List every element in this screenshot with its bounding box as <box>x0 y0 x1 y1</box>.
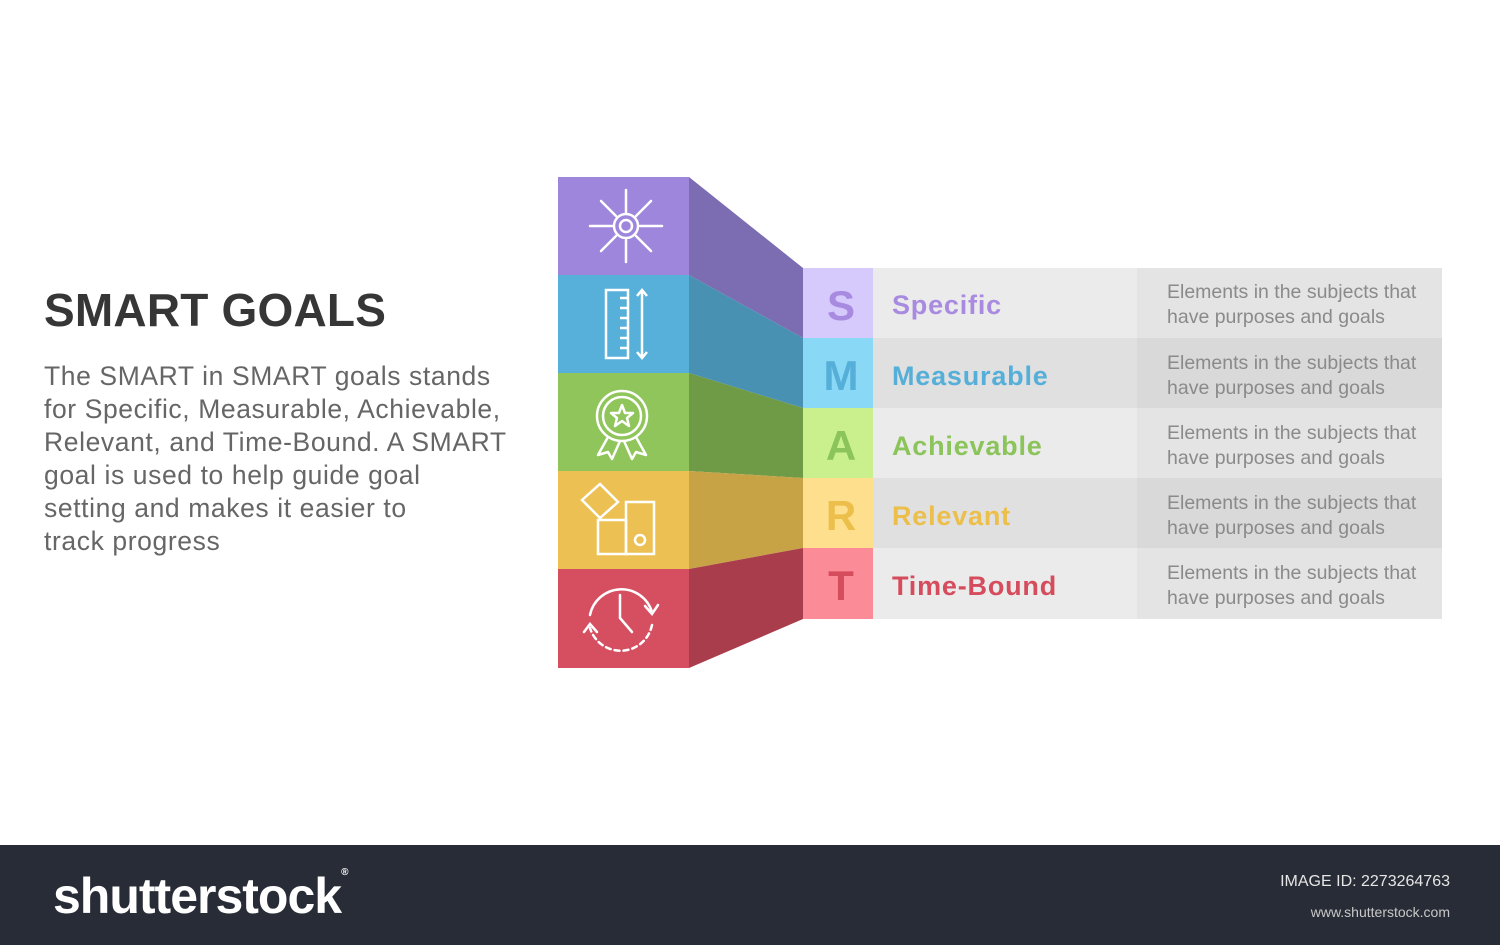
descriptions: have purposes and goals <box>1167 447 1385 469</box>
names: Specific <box>892 290 1002 320</box>
footer logo: shutterstock® <box>53 867 347 924</box>
descriptions: Elements in the subjects that <box>1167 492 1417 514</box>
names: Relevant <box>892 501 1011 531</box>
icon: award badge <box>597 391 647 459</box>
letter cells: S <box>827 282 855 329</box>
title: SMART GOALS <box>44 284 386 336</box>
descriptions: have purposes and goals <box>1167 517 1385 539</box>
description text: The SMART in SMART goals stands <box>44 361 491 391</box>
icon: target with arrows <box>590 190 662 262</box>
descriptions: Elements in the subjects that <box>1167 422 1417 444</box>
descriptions: have purposes and goals <box>1167 306 1385 328</box>
description text: track progress <box>44 526 220 556</box>
description text <box>44 361 507 556</box>
names: Achievable <box>892 431 1043 461</box>
descriptions: have purposes and goals <box>1167 377 1385 399</box>
description text: for Specific, Measurable, Achievable, <box>44 394 501 424</box>
3d block <box>558 177 803 668</box>
letter cells: R <box>826 492 856 539</box>
letter cells: M <box>824 352 858 399</box>
description text: Relevant, and Time-Bound. A SMART <box>44 427 507 457</box>
descriptions: Elements in the subjects that <box>1167 562 1417 584</box>
descriptions <box>1167 281 1417 609</box>
image id: IMAGE ID: 2273264763 <box>1280 873 1450 890</box>
descriptions: have purposes and goals <box>1167 587 1385 609</box>
letter cells: A <box>826 422 856 469</box>
icon: clock <box>584 589 658 651</box>
names <box>892 290 1057 601</box>
letter cells <box>803 268 873 619</box>
description text: goal is used to help guide goal <box>44 460 421 490</box>
icon: ruler <box>606 290 647 358</box>
names: Measurable <box>892 361 1049 391</box>
descriptions: Elements in the subjects that <box>1167 352 1417 374</box>
website: www.shutterstock.com <box>1311 904 1450 920</box>
table rows <box>803 268 1442 619</box>
names: Time-Bound <box>892 571 1057 601</box>
descriptions: Elements in the subjects that <box>1167 281 1417 303</box>
icon: puzzle <box>582 484 654 554</box>
description text: setting and makes it easier to <box>44 493 407 523</box>
letter cells: T <box>828 562 854 609</box>
footer bar <box>0 845 1500 945</box>
